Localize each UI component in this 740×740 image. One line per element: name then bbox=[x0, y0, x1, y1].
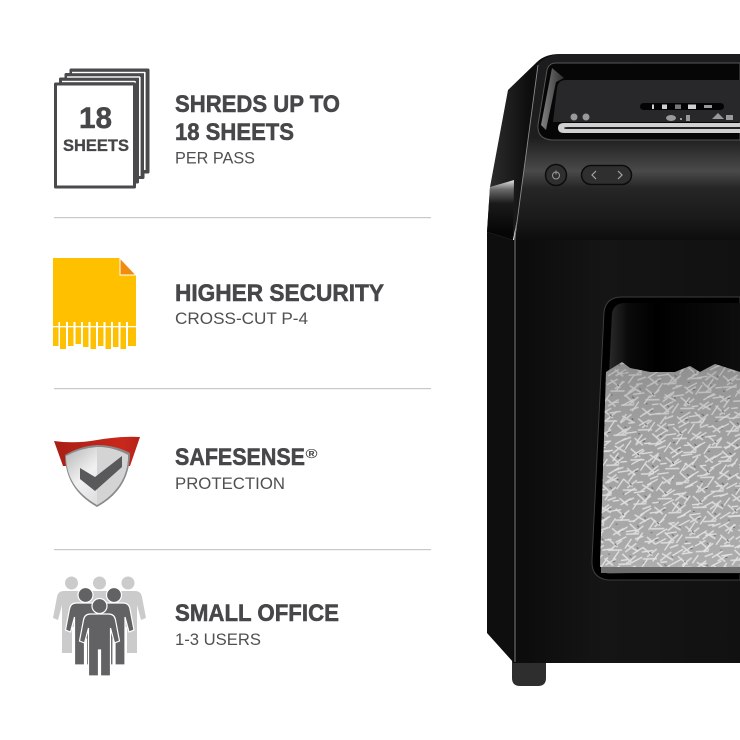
text: safesense protection: ® bbox=[306, 446, 318, 461]
shredded paper bbox=[600, 362, 740, 573]
upper side panel bbox=[487, 54, 560, 240]
arrow buttons bbox=[582, 166, 632, 184]
text: small office users: 1-3 USERS bbox=[175, 630, 261, 649]
top cap bbox=[514, 54, 740, 240]
window glass bbox=[600, 303, 740, 574]
LED status bar bbox=[640, 103, 724, 110]
cap edge highlight bbox=[515, 65, 538, 662]
text: higher security: HIGHER SECURITY bbox=[175, 280, 384, 307]
panel: safesense bbox=[54, 437, 318, 507]
text: safesense protection bbox=[175, 444, 318, 493]
panel: small office bbox=[53, 576, 339, 676]
text: shreds up to 18 sheets: SHREDS UP TO bbox=[175, 91, 340, 118]
icon: stack of 18 sheets: SHEETS bbox=[63, 137, 129, 155]
icon: stack of 18 sheets bbox=[56, 70, 148, 187]
text: shreds up to 18 sheets: 18 SHEETS bbox=[175, 119, 294, 146]
text: shreds up to 18 sheets bbox=[175, 91, 340, 168]
front body bbox=[513, 240, 740, 663]
panel: security level bbox=[53, 258, 384, 349]
window frame bbox=[592, 297, 740, 580]
panel: sheet capacity bbox=[56, 70, 340, 187]
text: safesense protection: SAFESENSE bbox=[175, 444, 305, 471]
icon: group of people bbox=[53, 576, 146, 676]
foot bbox=[512, 660, 546, 686]
text: safesense protection: PROTECTION bbox=[175, 474, 285, 493]
icon: stack of 18 sheets: 18 bbox=[79, 102, 112, 135]
side panel glossy flare bbox=[487, 180, 514, 240]
text: higher security bbox=[175, 280, 384, 328]
text: shreds up to 18 sheets: PER PASS bbox=[175, 148, 255, 168]
text: higher security: CROSS-CUT P-4 bbox=[175, 309, 308, 328]
text: small office users: SMALL OFFICE bbox=[175, 600, 339, 627]
text: small office users bbox=[175, 600, 339, 649]
control panel recess bbox=[538, 63, 740, 140]
lower side panel bbox=[487, 232, 513, 662]
icon: shield with check mark bbox=[54, 437, 140, 507]
icon: yellow shredded document bbox=[53, 258, 136, 349]
power button bbox=[546, 164, 566, 186]
shredder product photo bbox=[487, 54, 740, 686]
